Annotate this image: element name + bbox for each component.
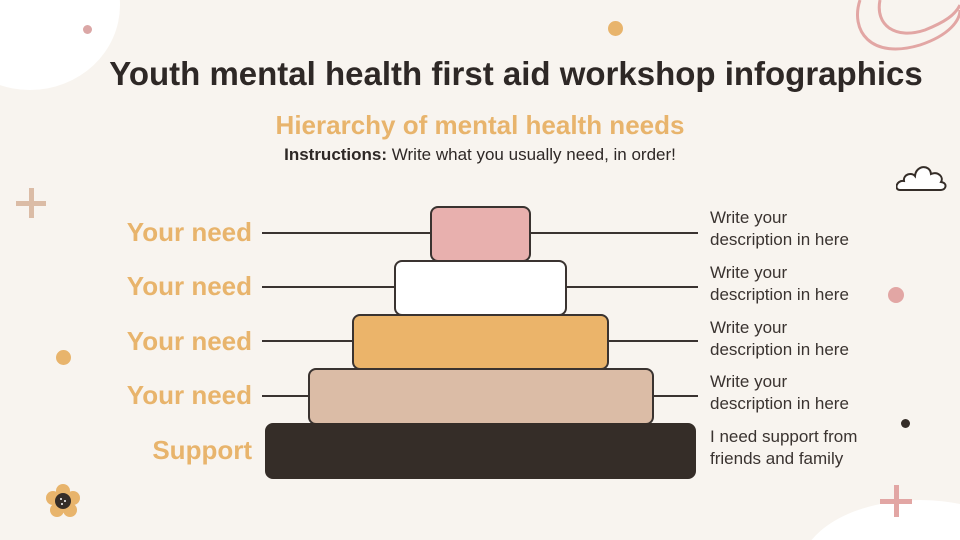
text: Your need — [127, 380, 252, 410]
text: description in here — [710, 394, 849, 413]
text: Write your — [710, 318, 787, 337]
layer 5 support — [265, 423, 696, 479]
connector lines — [262, 232, 698, 397]
subtitle: Hierarchy of mental health needs — [276, 110, 684, 140]
title: Youth mental health first aid workshop infographics — [109, 55, 923, 92]
layer 3 — [352, 314, 609, 370]
text: Your need — [127, 271, 252, 301]
plus icons — [16, 188, 46, 218]
text: description in here — [710, 340, 849, 359]
text: description in here — [710, 285, 849, 304]
instructions: Instructions: Write what you usually need, in order! — [284, 145, 676, 164]
layer 2 — [394, 260, 567, 316]
dots — [83, 25, 92, 34]
pyramid — [265, 206, 696, 479]
text: friends and family — [710, 449, 843, 468]
icon: cloud — [896, 166, 946, 191]
text: I need support from — [710, 427, 857, 446]
blob bottom-right — [800, 500, 960, 540]
swirl decoration — [856, 0, 960, 50]
layer 1 — [430, 206, 531, 262]
descriptions — [710, 208, 849, 249]
descriptions: description in here — [710, 230, 849, 249]
text: Your need — [127, 326, 252, 356]
text: Write your — [710, 263, 787, 282]
descriptions: Write your — [710, 208, 787, 227]
text: Write your — [710, 372, 787, 391]
layer 4 — [308, 368, 654, 425]
labels: Your need — [127, 217, 252, 247]
icon: flower — [46, 484, 80, 517]
blob top-left — [0, 0, 120, 90]
text: Support — [152, 435, 252, 465]
